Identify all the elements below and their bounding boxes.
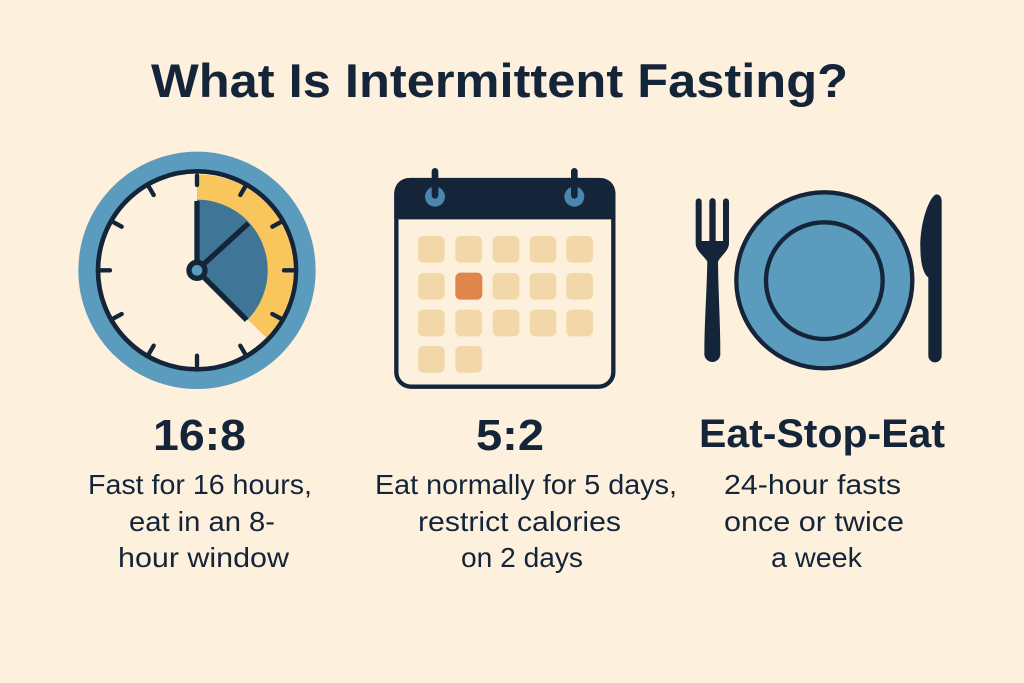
description: 16:8: eat in an 8- [129,506,275,537]
description: 5:2: restrict calories [418,506,621,537]
description: 16:8: hour window [118,542,290,573]
column: Eat-Stop-Eat [699,412,945,573]
icon: clock [78,152,316,389]
description: Eat-Stop-Eat [724,469,904,573]
heading: 5:2: 5:2 [476,411,544,460]
column: 5:2 [375,411,677,573]
heading: 16:8: 16:8 [153,411,246,460]
description: Eat-Stop-Eat: a week [771,542,863,573]
description: 16:8 [88,469,312,573]
icon: plate with fork and knife [696,192,942,368]
description: 5:2 [375,469,677,573]
title: What Is Intermittent Fasting? [151,54,848,107]
description: 5:2: Eat normally for 5 days, [375,469,677,500]
description: 5:2: on 2 days [461,542,583,573]
icon: calendar [394,171,615,387]
heading: Eat-Stop-Eat: Eat-Stop-Eat [699,412,945,456]
column: 16:8 [88,411,312,573]
description: 16:8: Fast for 16 hours, [88,469,312,500]
description: Eat-Stop-Eat: 24-hour fasts [724,469,901,500]
description: Eat-Stop-Eat: once or twice [724,506,904,537]
